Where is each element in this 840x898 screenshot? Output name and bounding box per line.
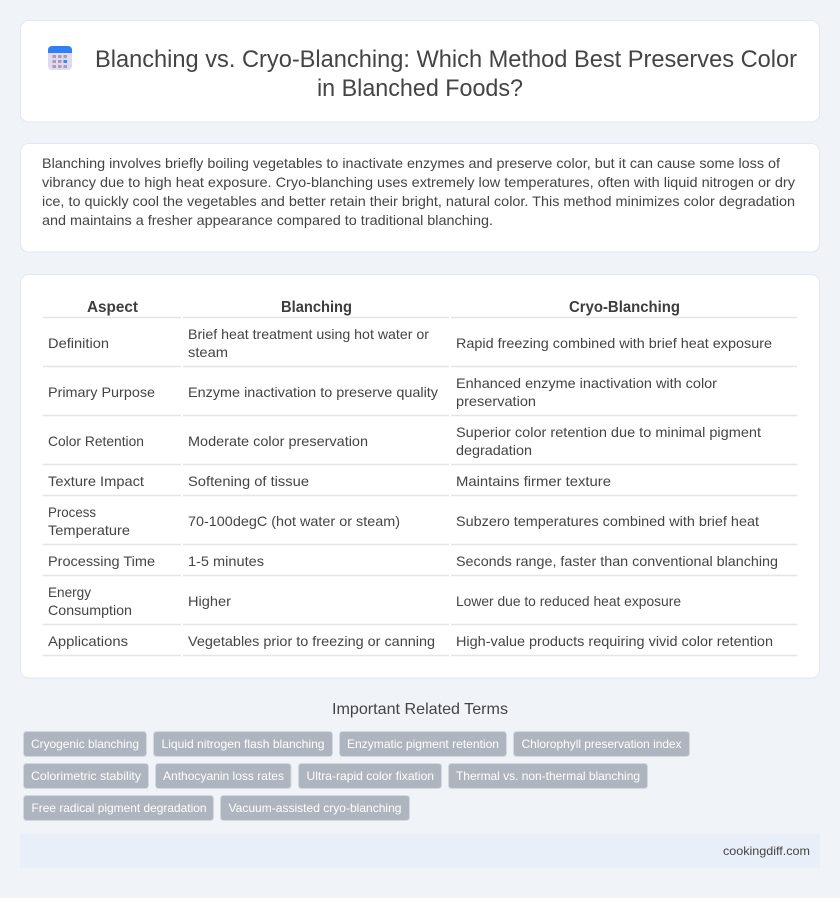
row: process temperature: Process — [48, 504, 96, 520]
row: primary purpose: Enhanced enzyme inactivation with color — [456, 375, 717, 391]
tag: Anthocyanin loss rates — [163, 769, 284, 783]
tag — [156, 764, 291, 788]
footer — [20, 834, 820, 868]
panel: title card — [20, 20, 820, 122]
tag — [154, 732, 332, 756]
text block: introduction paragraph — [42, 155, 795, 228]
tag — [340, 732, 506, 756]
row: definition: Brief heat treatment using hot water or — [188, 326, 429, 342]
row: color retention: degradation — [456, 442, 532, 458]
row: applications: Vegetables prior to freezing or canning — [188, 633, 435, 649]
tag: Chlorophyll preservation index — [522, 737, 682, 751]
text block: introduction paragraph: vibrancy due to high heat exposure. Cryo-blanching uses extremely low temperatures, often with liquid nitrogen or dry — [42, 174, 795, 190]
table header row: Blanching — [281, 299, 352, 316]
row: definition — [48, 326, 772, 360]
row: applications: Applications — [48, 633, 128, 649]
row: texture impact: Texture Impact — [48, 473, 144, 489]
row: process temperature: 70-100degC (hot water or steam) — [188, 513, 400, 529]
icon: calendar — [48, 46, 72, 70]
tag: Liquid nitrogen flash blanching — [162, 737, 324, 751]
row: process temperature: Subzero temperatures combined with brief heat — [456, 513, 759, 529]
tag — [24, 796, 214, 820]
row: definition: Definition — [48, 335, 109, 351]
tag: Thermal vs. non-thermal blanching — [456, 769, 640, 783]
row: processing time: Seconds range, faster than conventional blanching — [456, 553, 778, 569]
row: energy consumption: Consumption — [48, 602, 132, 618]
title — [95, 46, 797, 102]
row: primary purpose: Primary Purpose — [48, 384, 155, 400]
row: energy consumption: Higher — [188, 593, 231, 609]
row: applications: High-value products requiring vivid color retention — [456, 633, 773, 649]
row: processing time: 1-5 minutes — [188, 553, 264, 569]
row: process temperature — [48, 504, 759, 538]
row: color retention — [48, 424, 761, 458]
tag — [448, 764, 648, 788]
row: color retention: Superior color retention due to minimal pigment — [456, 424, 761, 440]
row: texture impact: Softening of tissue — [188, 473, 309, 489]
row: color retention: Color Retention — [48, 433, 144, 449]
text block: introduction paragraph: ice, to quickly cool the vegetables and better retain their bright, natural color. This method minimizes color degradation — [42, 193, 795, 209]
row: color retention: Moderate color preservation — [188, 433, 368, 449]
text block: introduction paragraph: Blanching involves briefly boiling vegetables to inactivate enzymes and preserve color, but it can cause some loss of — [42, 155, 780, 171]
tag — [24, 764, 148, 788]
row: energy consumption: Energy — [48, 584, 91, 600]
panel: related term tags — [24, 732, 690, 820]
table header row — [87, 299, 680, 316]
footer: cookingdiff.com — [723, 844, 810, 858]
table header row: Aspect — [87, 299, 139, 316]
row: processing time — [48, 553, 778, 569]
tag — [24, 732, 146, 756]
row: energy consumption: Lower due to reduced heat exposure — [456, 593, 681, 609]
row: energy consumption — [48, 584, 681, 618]
row: process temperature: Temperature — [48, 522, 130, 538]
tag — [298, 764, 442, 788]
tag: Cryogenic blanching — [31, 737, 139, 751]
title: in Blanched Foods? — [317, 75, 523, 102]
panel: introduction — [20, 144, 820, 252]
row: primary purpose: preservation — [456, 393, 536, 409]
title: Blanching vs. Cryo-Blanching: Which Method Best Preserves Color — [95, 46, 797, 73]
row: definition: steam — [188, 344, 228, 360]
row: definition: Rapid freezing combined with brief heat exposure — [456, 335, 772, 351]
row: primary purpose — [48, 375, 717, 409]
row: texture impact — [48, 473, 611, 489]
row: processing time: Processing Time — [48, 553, 155, 569]
heading: important related terms: Important Related Terms — [332, 701, 508, 718]
text block: introduction paragraph: and maintains a fresher appearance compared to traditional blanching. — [42, 212, 493, 228]
tag: Colorimetric stability — [31, 769, 141, 783]
tag: Free radical pigment degradation — [32, 801, 206, 815]
row: texture impact: Maintains firmer texture — [456, 473, 611, 489]
row: primary purpose: Enzyme inactivation to preserve quality — [188, 384, 438, 400]
panel: comparison table — [20, 274, 820, 678]
tag — [514, 732, 690, 756]
tag: Ultra-rapid color fixation — [306, 769, 434, 783]
tag — [220, 796, 410, 820]
table header row: Cryo-Blanching — [569, 299, 680, 316]
tag: Enzymatic pigment retention — [347, 737, 499, 751]
tag: Vacuum-assisted cryo-blanching — [228, 801, 402, 815]
row: applications — [48, 633, 773, 649]
